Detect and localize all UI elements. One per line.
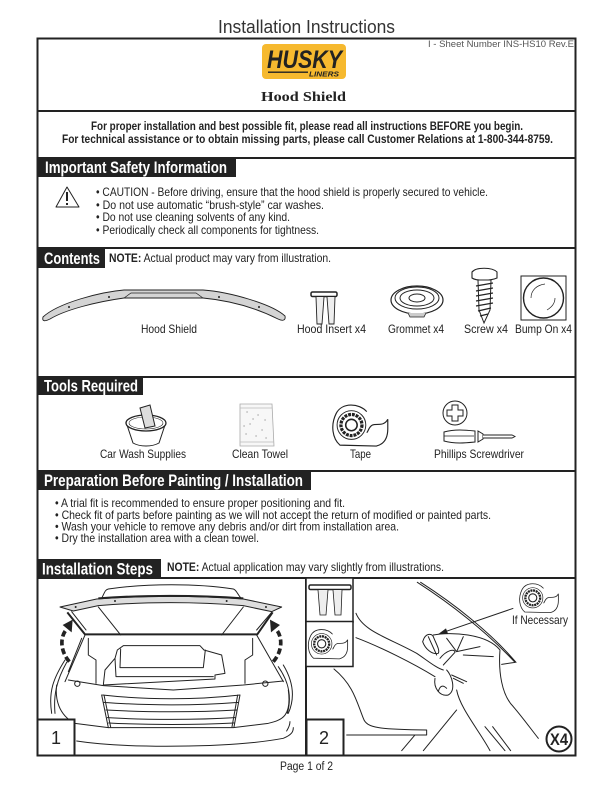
step 2 number box: 2	[319, 728, 329, 748]
tools labels: Car Wash Supplies	[100, 447, 186, 461]
panel: step 1 car hood illustration	[51, 585, 293, 746]
contents labels: Hood Insert x4	[297, 322, 366, 336]
safety list: • Do not use automatic “brush-style” car washes.	[96, 198, 324, 212]
preparation list: • Wash your vehicle to remove any debris and/or dirt from installation area.	[55, 520, 399, 534]
safety list: • CAUTION - Before driving, ensure that the hood shield is properly secured to vehicle.	[96, 185, 488, 199]
heading: installation steps: Installation Steps	[42, 560, 153, 578]
quantity badge x4: X4	[550, 730, 568, 749]
contents labels: Hood Shield	[141, 322, 197, 336]
intro notice	[62, 119, 553, 146]
sheet number: I - Sheet Number INS-HS10 Rev.E	[428, 39, 574, 50]
heading: preparation: Preparation Before Painting / Installation	[44, 471, 303, 490]
preparation list: • Dry the installation area with a clean towel.	[55, 531, 259, 545]
preparation list: • A trial fit is recommended to ensure proper positioning and fit.	[55, 496, 345, 510]
safety list	[96, 185, 488, 237]
logo: Husky Liners	[262, 44, 346, 79]
logo: Husky Liners: HUSKY	[267, 46, 344, 74]
safety list: • Periodically check all components for tightness.	[96, 223, 319, 237]
quantity badge x4	[546, 726, 572, 752]
tool: tape	[333, 405, 388, 446]
panel: step 2 divider and parts column	[305, 578, 353, 756]
contents labels: Bump On x4	[515, 322, 572, 336]
heading: tools: Tools Required	[44, 376, 138, 396]
steps note: NOTE: Actual application may vary slightly from illustrations.	[167, 560, 444, 574]
part: hood shield	[43, 290, 285, 321]
logo: Husky Liners: LINERS	[309, 70, 339, 78]
heading: safety: Important Safety Information	[45, 158, 227, 177]
tools labels	[100, 447, 524, 461]
part: grommet	[391, 286, 443, 317]
tool: phillips screwdriver	[443, 401, 515, 443]
contents labels: Screw x4	[464, 322, 508, 336]
heading: contents: Contents	[44, 249, 100, 268]
tool: car wash supplies	[126, 405, 166, 446]
intro notice: For proper installation and best possible fit, please read all instructions BEFORE you begin.	[91, 119, 523, 133]
contents labels	[141, 322, 572, 336]
icon: tape in parts column	[308, 630, 348, 659]
tools labels: Tape	[350, 447, 371, 461]
preparation list	[55, 496, 491, 545]
part: hood insert	[311, 292, 337, 324]
icon: tape if necessary	[520, 584, 558, 613]
page number: Page 1 of 2	[280, 761, 333, 773]
tools labels: Clean Towel	[232, 447, 288, 461]
page frame	[38, 38, 576, 756]
part: bump on	[521, 276, 566, 320]
tools labels: Phillips Screwdriver	[434, 447, 524, 461]
label: if necessary: If Necessary	[512, 613, 568, 627]
contents labels: Grommet x4	[388, 322, 444, 336]
preparation list: • Check fit of parts before painting as we will not accept the return of modified or painted parts.	[55, 508, 491, 522]
tool: clean towel	[240, 404, 274, 446]
safety list: • Do not use cleaning solvents of any kind.	[96, 210, 290, 224]
contents note: NOTE: Actual product may vary from illustration.	[109, 251, 331, 265]
icon: warning triangle	[56, 187, 79, 207]
title: Installation Instructions	[218, 17, 395, 37]
panel: step 2 hand illustration	[334, 582, 538, 751]
product name: Hood Shield	[261, 90, 346, 105]
step 2 number box	[306, 720, 344, 756]
part: screw	[472, 268, 497, 323]
step 1 number box: 1	[51, 728, 61, 748]
step 1 number box	[38, 720, 74, 756]
